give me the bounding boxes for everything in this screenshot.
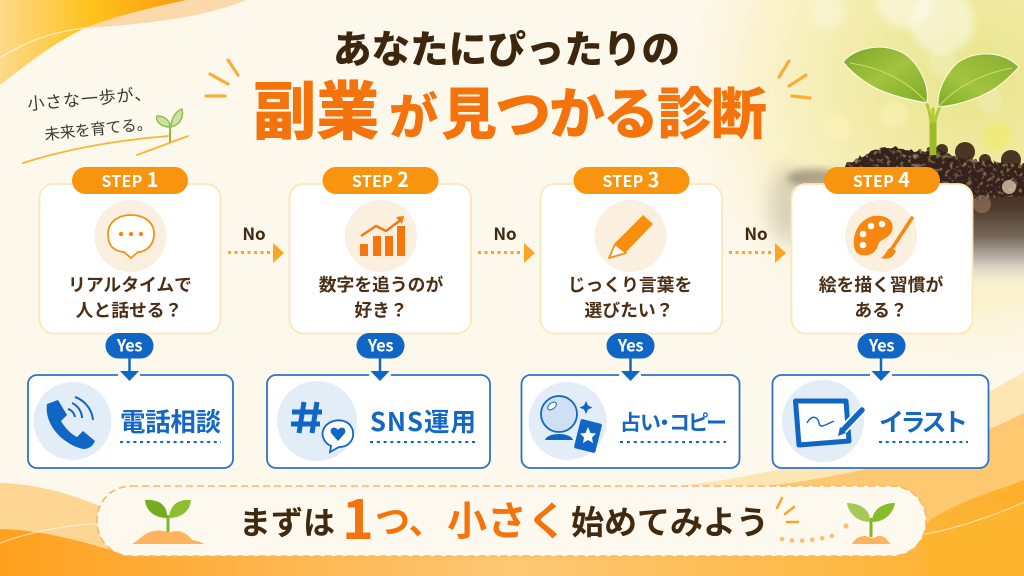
yes connector 4: Yes bbox=[868, 332, 894, 356]
icon: hashtag and heart bubble bbox=[277, 381, 357, 461]
banner message: 1 bbox=[342, 476, 374, 555]
icon: left sprout bbox=[132, 500, 204, 544]
handwritten note: 小さな一歩が、 bbox=[26, 79, 152, 115]
panel: result fortune and copywriting bbox=[522, 373, 740, 468]
photo: sprout bbox=[843, 47, 1019, 155]
bottom banner bbox=[97, 476, 926, 556]
question 2: 好き？ bbox=[354, 296, 408, 322]
icon: speech bubble bbox=[94, 200, 166, 272]
photo: bokeh background bbox=[620, 0, 1024, 380]
arrow: no 3 to 4: No bbox=[744, 220, 768, 245]
question 4: 絵を描く習慣が bbox=[819, 271, 943, 297]
yes connector 2 bbox=[356, 332, 404, 381]
burst left of title bbox=[206, 60, 238, 96]
step 4 badge bbox=[824, 164, 940, 194]
question 4: ある？ bbox=[854, 296, 908, 322]
panel: result SNS management bbox=[267, 373, 490, 468]
panel: step 4 bbox=[792, 164, 972, 334]
question 2: 数字を追うのが bbox=[319, 271, 443, 297]
top-left wave decoration bbox=[0, 0, 246, 85]
burst right of title bbox=[779, 61, 810, 98]
yes connector 2: Yes bbox=[367, 332, 393, 356]
bottom wave decoration bbox=[0, 372, 1024, 576]
yes connector 3 bbox=[606, 332, 654, 381]
icon: pencil bbox=[594, 200, 666, 272]
title line 1: あなたにぴったりの bbox=[333, 19, 680, 75]
handwritten note: 未来を育てる。 bbox=[43, 112, 153, 145]
icon: telephone bbox=[34, 382, 112, 460]
banner message: 始めてみよう bbox=[571, 496, 769, 544]
panel: step 2 bbox=[290, 164, 471, 334]
question 1: 人と話せる？ bbox=[76, 296, 182, 322]
title line 2: 見つかる診断 bbox=[441, 70, 766, 151]
title line 2: が bbox=[389, 78, 438, 149]
question 1: リアルタイムで bbox=[68, 271, 192, 297]
yes connector 1: Yes bbox=[116, 332, 142, 356]
label: illustration: イラスト bbox=[879, 403, 968, 439]
question 3: 選びたい？ bbox=[585, 296, 673, 322]
label: phone consultation: 電話相談 bbox=[120, 402, 221, 439]
panel: result illustration bbox=[772, 373, 988, 468]
photo: soil mound bbox=[768, 142, 1024, 290]
handwritten note bbox=[26, 79, 153, 145]
step 4 badge: STEP 4 bbox=[853, 164, 910, 193]
banner message: 小さく bbox=[447, 489, 567, 547]
arrow: no 3 to 4 bbox=[729, 220, 786, 263]
banner message: つ、 bbox=[375, 494, 444, 545]
panel: step 3 bbox=[540, 164, 722, 334]
step 3 badge bbox=[574, 164, 690, 194]
icon: rising chart bbox=[345, 200, 417, 272]
arrow: no 2 to 3: No bbox=[493, 220, 517, 245]
step 2 badge bbox=[322, 164, 438, 194]
step 3 badge: STEP 3 bbox=[602, 164, 660, 193]
label: fortune and copywriting: 占い・コピー bbox=[620, 407, 727, 437]
burst and dotted trail bbox=[777, 498, 849, 541]
panel: result phone consultation bbox=[28, 373, 233, 468]
step 2 badge: STEP 2 bbox=[352, 164, 409, 193]
title line 2: 副業 bbox=[253, 61, 379, 153]
step 1 badge: STEP 1 bbox=[101, 164, 159, 193]
yes connector 3: Yes bbox=[617, 332, 643, 356]
note sprout icon bbox=[157, 109, 183, 142]
note underline strokes bbox=[23, 136, 188, 163]
arrow: no 1 to 2 bbox=[228, 220, 284, 263]
banner message: まずは bbox=[239, 498, 335, 544]
arrow: no 2 to 3 bbox=[478, 220, 535, 263]
yes connector 1 bbox=[106, 332, 154, 381]
icon: crystal ball and card bbox=[528, 382, 606, 460]
icon: palette and brush bbox=[845, 200, 917, 272]
label: SNS management: SNS運用 bbox=[370, 402, 476, 439]
question 3: じっくり言葉を bbox=[568, 271, 692, 297]
icon: right sprout bbox=[847, 503, 895, 544]
panel: step 1 bbox=[40, 164, 220, 334]
step 1 badge bbox=[72, 164, 188, 194]
yes connector 4 bbox=[858, 332, 906, 381]
icon: drawing tablet and pen bbox=[782, 380, 864, 462]
arrow: no 1 to 2: No bbox=[242, 220, 266, 245]
